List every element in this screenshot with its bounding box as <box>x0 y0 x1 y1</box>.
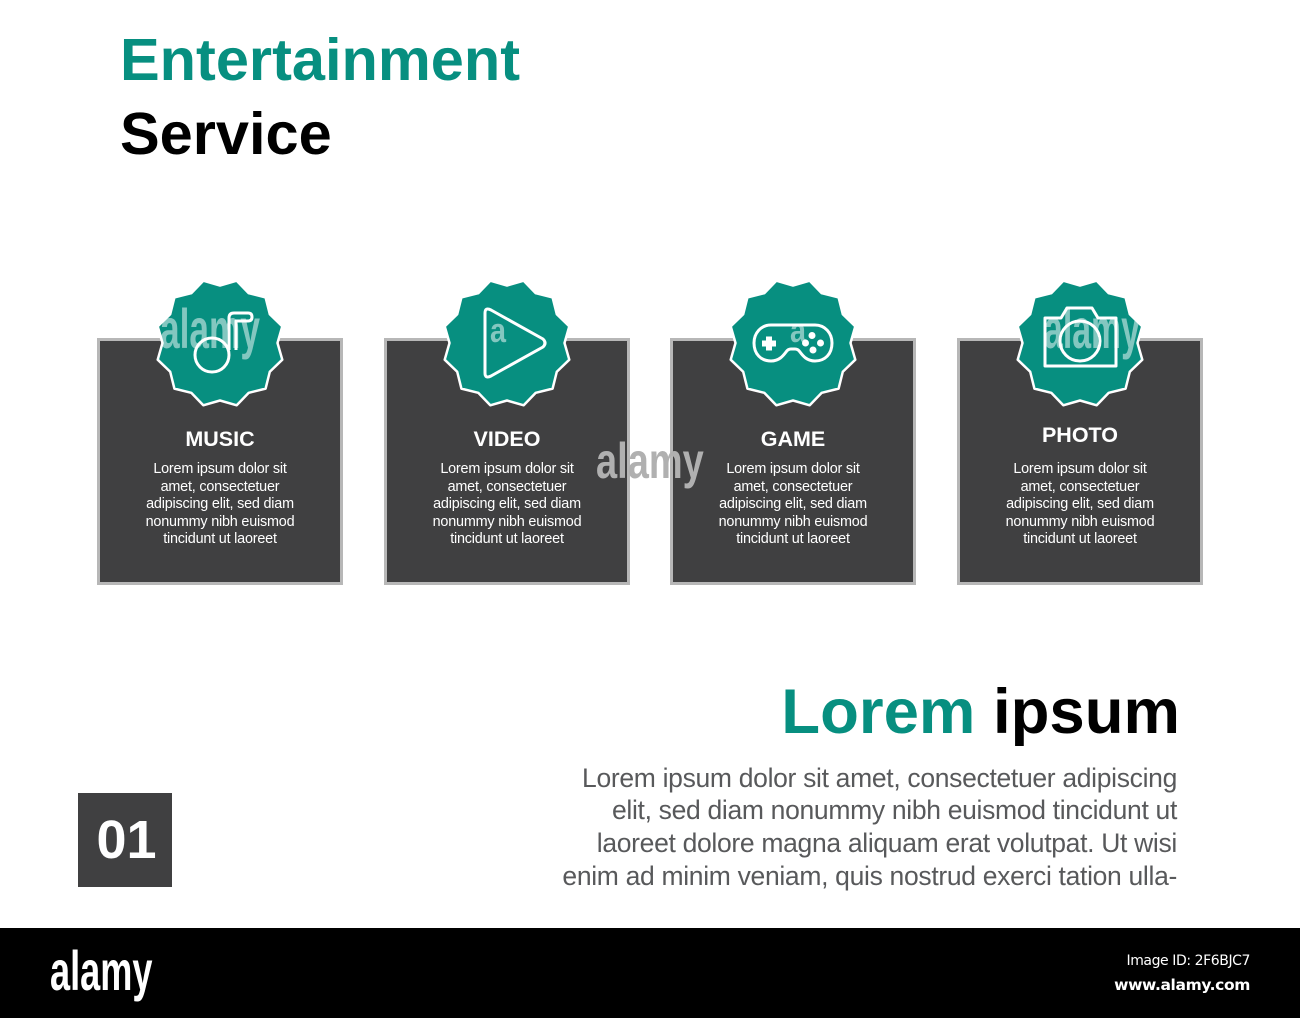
watermark: alamy <box>596 433 704 489</box>
title line: Entertainment: Entertainment <box>120 26 520 93</box>
footer logo: alamy <box>50 939 152 1002</box>
card background <box>97 338 343 585</box>
icon: camera badge: alamy <box>1044 297 1140 360</box>
heading: GAME: GAME <box>761 427 825 451</box>
title line: Service: Service <box>120 100 332 167</box>
panel: photo <box>957 282 1203 585</box>
description text: amet, consectetuer <box>734 478 852 494</box>
description text <box>719 461 867 547</box>
heading: MUSIC: MUSIC <box>185 427 255 451</box>
panel: music <box>97 282 343 585</box>
description text: adipiscing elit, sed diam <box>719 496 867 512</box>
description text: nonummy nibh euismod <box>433 514 581 530</box>
description text: Lorem ipsum dolor sit <box>726 461 860 477</box>
icon: gamepad badge <box>729 282 857 406</box>
page number box: 01 <box>96 810 157 870</box>
card background <box>957 338 1203 585</box>
description text: adipiscing elit, sed diam <box>433 496 581 512</box>
website: www.alamy.com <box>1114 976 1250 994</box>
icon: camera badge <box>1016 282 1144 406</box>
panel: video <box>384 282 630 585</box>
image id: Image ID: 2F6BJC7 <box>1126 953 1250 969</box>
description text: tincidunt ut laoreet <box>736 531 850 547</box>
card background <box>384 338 630 585</box>
description text <box>433 461 581 547</box>
description text: tincidunt ut laoreet <box>450 531 564 547</box>
description text: adipiscing elit, sed diam <box>146 496 294 512</box>
icon: play badge: a <box>490 312 507 350</box>
heading: VIDEO: VIDEO <box>474 427 540 451</box>
description text <box>1006 461 1154 547</box>
body line 1: Lorem ipsum dolor sit amet, consectetuer adipiscing <box>582 763 1177 793</box>
description text: tincidunt ut laoreet <box>1023 531 1137 547</box>
footer bar <box>0 928 1300 1018</box>
icon: gamepad badge: a <box>790 312 807 350</box>
heading: PHOTO: PHOTO <box>1042 423 1118 447</box>
description text <box>146 461 294 547</box>
panel: game <box>670 282 916 585</box>
body line 3: laoreet dolore magna aliquam erat volutpat. Ut wisi <box>597 828 1177 858</box>
icon: music note badge <box>156 282 284 406</box>
body line 2: elit, sed diam nonummy nibh euismod tincidunt ut <box>612 795 1177 825</box>
description text: amet, consectetuer <box>1021 478 1139 494</box>
card background <box>670 338 916 585</box>
icon: play badge <box>443 282 571 406</box>
title <box>120 26 520 167</box>
description text: adipiscing elit, sed diam <box>1006 496 1154 512</box>
body line 4: enim ad minim veniam, quis nostrud exerci tation ulla- <box>562 861 1177 891</box>
body text <box>562 763 1178 891</box>
description text: amet, consectetuer <box>448 478 566 494</box>
description text: tincidunt ut laoreet <box>163 531 277 547</box>
description text: Lorem ipsum dolor sit <box>440 461 574 477</box>
description text: nonummy nibh euismod <box>719 514 867 530</box>
description text: Lorem ipsum dolor sit <box>1013 461 1147 477</box>
description text: amet, consectetuer <box>161 478 279 494</box>
description text: nonummy nibh euismod <box>146 514 294 530</box>
icon: music note badge: alamy <box>160 297 260 360</box>
page number box <box>78 793 172 887</box>
heading: Lorem ipsum: Lorem ipsum <box>781 677 1180 747</box>
description text: nonummy nibh euismod <box>1006 514 1154 530</box>
description text: Lorem ipsum dolor sit <box>153 461 287 477</box>
